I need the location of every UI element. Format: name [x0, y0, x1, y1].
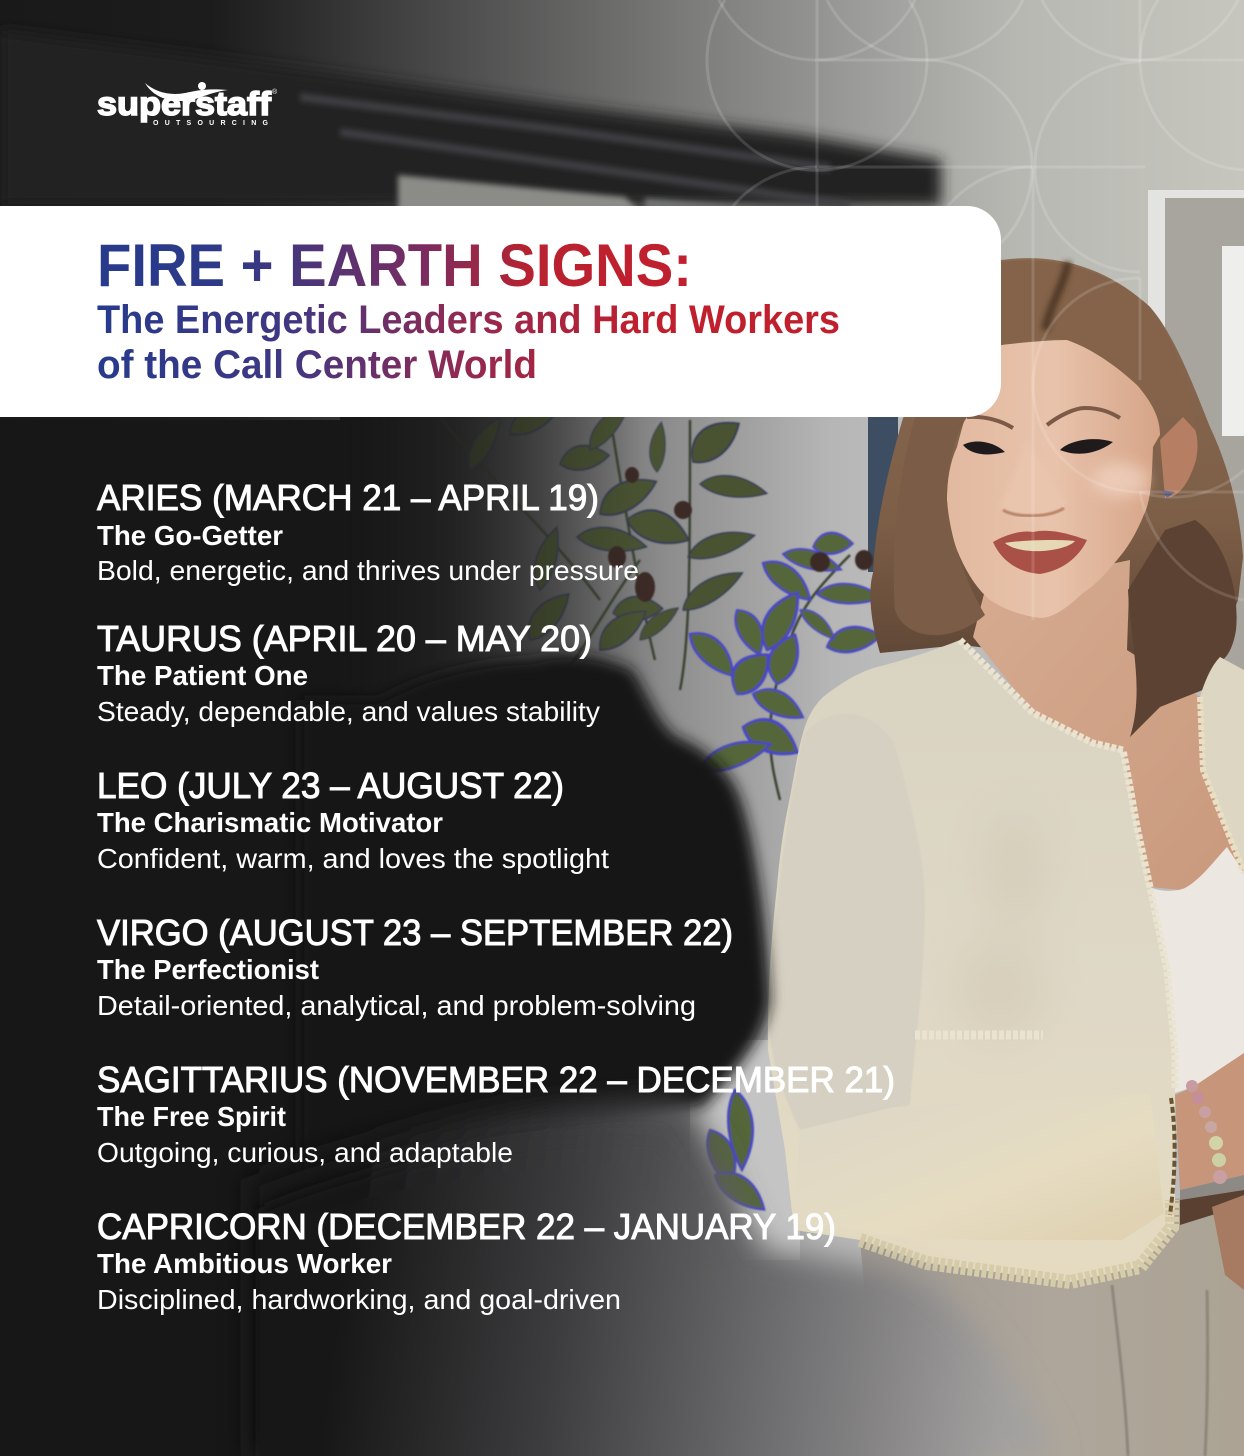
cheek highlight — [1092, 462, 1148, 498]
light wall gap beside sleeve — [690, 1040, 800, 1260]
hair part and crown — [1001, 260, 1195, 430]
sign: Sagittarius: SAGITTARIUS (NOVEMBER 22 – DECEMBER 21) — [97, 1059, 895, 1100]
logo wordmark: superstaff — [97, 85, 272, 122]
sign: Taurus: Steady, dependable, and values stability — [97, 696, 600, 727]
pants — [860, 1190, 1244, 1456]
logo dot — [198, 82, 206, 90]
plant behind text — [440, 392, 883, 1217]
ear — [1160, 417, 1197, 498]
left hair — [894, 417, 985, 635]
sign: Capricorn: CAPRICORN (DECEMBER 22 – JANUARY 19) — [97, 1206, 836, 1247]
jacket shading — [955, 810, 1045, 1040]
forearm cuff — [794, 1093, 1164, 1240]
sign: Leo: The Charismatic Motivator — [97, 807, 443, 838]
sign: Taurus: TAURUS (APRIL 20 – MAY 20) — [97, 618, 592, 659]
window opening right — [645, 198, 790, 210]
picture frame on wall — [1148, 190, 1244, 490]
title panel — [0, 206, 1001, 417]
neck and chest — [973, 560, 1244, 890]
subtitle line 1: The Energetic Leaders and Hard Workers — [97, 298, 840, 342]
blurred window top — [0, 30, 941, 206]
pocket trim — [915, 1030, 1043, 1040]
sign: Sagittarius — [97, 1059, 895, 1168]
sign: Aries: Bold, energetic, and thrives under pressure — [97, 555, 639, 586]
forearm skin — [1175, 1053, 1244, 1190]
sign: Aries: ARIES (MARCH 21 – APRIL 19) — [97, 477, 599, 518]
front hair strands — [1128, 520, 1237, 737]
sign: Capricorn: The Ambitious Worker — [97, 1248, 392, 1279]
sign: Aries — [97, 477, 639, 586]
hair — [870, 258, 1243, 737]
lips — [993, 531, 1087, 574]
sign: Taurus: The Patient One — [97, 660, 308, 691]
sign: Virgo: The Perfectionist — [97, 954, 319, 985]
sign: Sagittarius: The Free Spirit — [97, 1101, 286, 1132]
sign: Leo — [97, 765, 609, 874]
jacket right panel — [1200, 657, 1244, 873]
woman — [768, 258, 1244, 1456]
sign: Virgo: Detail-oriented, analytical, and problem-solving — [97, 990, 696, 1021]
sign: Leo: LEO (JULY 23 – AUGUST 22) — [97, 765, 564, 806]
sleeve shade — [770, 714, 925, 1130]
brows — [967, 408, 1120, 428]
hand — [1212, 1195, 1244, 1290]
sign: Virgo: VIRGO (AUGUST 23 – SEPTEMBER 22) — [97, 912, 733, 953]
left dimming — [340, 417, 640, 1317]
window blind slats — [300, 97, 850, 205]
brighter leaves — [683, 531, 883, 1217]
main jacket — [768, 640, 1175, 1282]
logo tagline: OUTSOURCING — [153, 120, 269, 127]
decorative line pattern — [707, 0, 1244, 620]
pleats — [1112, 1285, 1208, 1456]
belt strip — [1180, 1175, 1244, 1200]
logo registered mark: ® — [272, 88, 278, 96]
sign: Taurus — [97, 618, 600, 727]
jacket trim — [960, 640, 1175, 1090]
blurred foreground head silhouette — [300, 655, 770, 1180]
nose — [1000, 440, 1066, 518]
title: FIRE + EARTH SIGNS: — [97, 232, 692, 299]
earring — [1161, 490, 1175, 498]
olives — [608, 467, 873, 602]
eyes — [963, 439, 1113, 454]
window strip behind hair — [868, 417, 898, 572]
bracelet — [1170, 1080, 1227, 1215]
blurred foreground shoulder — [250, 1103, 1055, 1456]
nose shadow — [1003, 508, 1064, 516]
lower trim — [860, 1200, 1172, 1282]
sign: Capricorn: Disciplined, hardworking, and goal-driven — [97, 1284, 621, 1315]
window opening — [398, 175, 640, 212]
sign: Capricorn — [97, 1206, 836, 1315]
sign: Aries: The Go-Getter — [97, 520, 283, 551]
sign: Virgo — [97, 912, 733, 1021]
waist dark — [1180, 1190, 1244, 1225]
logo — [97, 82, 278, 127]
sign: Leo: Confident, warm, and loves the spotlight — [97, 843, 609, 874]
parting shadow — [1045, 262, 1068, 330]
face — [947, 340, 1160, 618]
frame stone inset — [1165, 198, 1244, 678]
right panel trim — [1200, 697, 1244, 873]
sign: Sagittarius: Outgoing, curious, and adaptable — [97, 1137, 513, 1168]
subtitle line 2: of the Call Center World — [97, 343, 537, 387]
logo swoosh — [145, 83, 228, 101]
frame white card — [1222, 246, 1244, 436]
teeth — [1005, 540, 1075, 551]
white top — [1150, 847, 1244, 1093]
